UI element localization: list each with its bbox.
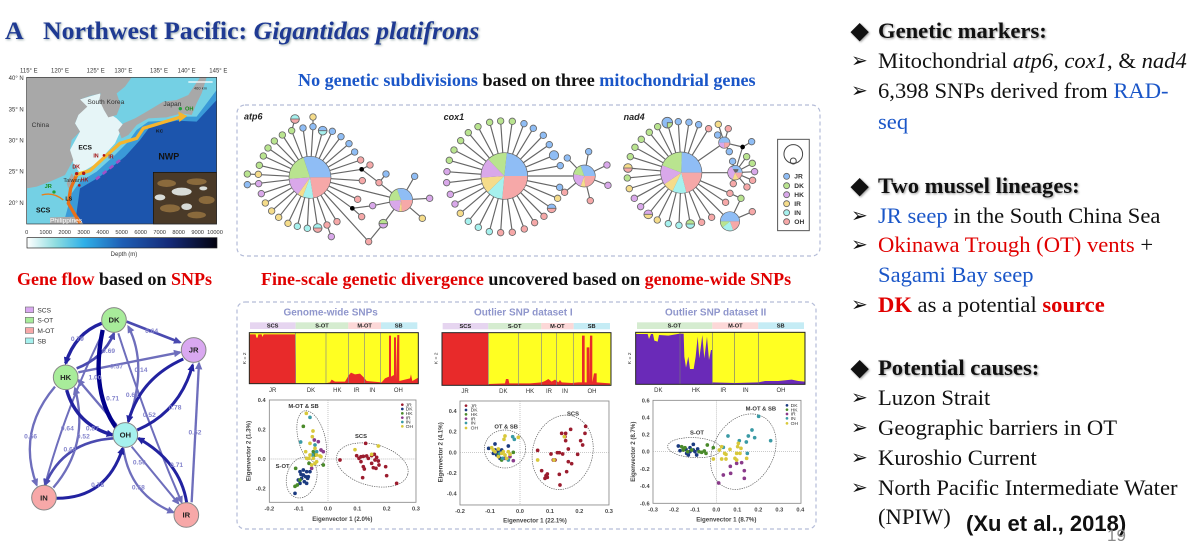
heading: two mussel lineages: Two mussel lineages:: [878, 173, 1080, 198]
chart: PCA scatter plot: 0.0: [712, 508, 720, 514]
map: Northwest Pacific bathymetry: 135° E: [150, 68, 168, 74]
chart: gene flow network: HK: [60, 373, 72, 382]
chart: gene flow network: 0.58: [132, 485, 145, 492]
chart: PCA scatter plot: 0.6: [642, 398, 650, 404]
chart: PCA scatter plot: S-OT: [276, 464, 290, 470]
chart: PCA scatter plot: 0.1: [546, 509, 554, 515]
chart: PCA scatter plot: 0.4: [796, 508, 805, 514]
chart: PCA scatter plot: OT & SB: [494, 424, 518, 430]
legend: haplotype populations: OH: [794, 219, 804, 226]
text block: genetic markers: seq: [878, 109, 908, 134]
chart: PCA scatter plot: SCS: [355, 434, 367, 440]
chart: PCA scatter plot: -0.3: [648, 508, 658, 514]
text block: potential causes: Geographic barriers in OT: [878, 415, 1117, 440]
chart: gene flow network: 0.68: [64, 446, 77, 453]
chart: gene flow network: 0.56: [24, 433, 37, 440]
chart: STRUCTURE bar plot: SCS: [460, 324, 471, 330]
text block: potential causes: Luzon Strait: [878, 385, 990, 410]
chart: STRUCTURE bar plot: OH: [776, 388, 785, 394]
text block: potential causes: North Pacific Intermediate Water: [878, 475, 1178, 500]
chart: STRUCTURE bar plot: OH: [394, 388, 403, 394]
chart: PCA scatter plot: 0.0: [642, 450, 650, 456]
chart: PCA scatter plot: SCS: [567, 411, 579, 417]
chart: STRUCTURE bar plot: IR: [720, 388, 727, 394]
chart: PCA scatter plot: 0.0: [258, 457, 266, 463]
text block: potential causes: (NPIW): [878, 504, 951, 529]
chart: gene flow network: 0.52: [188, 430, 202, 437]
legend: haplotype populations: DK: [794, 183, 804, 190]
chart: gene flow network: SB: [37, 338, 47, 345]
chart: gene flow network: [24, 307, 206, 527]
chart: PCA scatter plot: HK: [791, 407, 798, 413]
chart: PCA scatter plot: 0.1: [733, 508, 741, 514]
chart: gene flow network: 0.52: [143, 412, 156, 419]
heading: fine-scale divergence: Fine-scale genetic divergence uncovered based on genome-wide SNPs: [261, 269, 791, 289]
chart: PCA scatter plot: 0.2: [258, 427, 266, 433]
chart: PCA scatter plot: 0.2: [449, 430, 457, 436]
chart: STRUCTURE bar plot: DK: [654, 388, 662, 394]
map: Northwest Pacific bathymetry: 9000: [191, 230, 204, 236]
chart: PCA scatter plot: 0.3: [775, 508, 783, 514]
text block: genetic markers: Mitochondrial atp6, cox1, & nad4: [878, 48, 1187, 73]
text block: potential causes: ➢: [851, 417, 868, 439]
text block: potential causes: ➢: [851, 477, 868, 499]
chart: PCA scatter plot: Eigenvector 1 (22.1%): [503, 518, 567, 525]
panel: outlier SNP dataset II: [627, 308, 805, 523]
map: Northwest Pacific bathymetry: 40° N: [9, 76, 24, 82]
chart: PCA scatter plot: -0.2: [447, 471, 457, 477]
chart: STRUCTURE bar plot: M-OT: [550, 324, 565, 330]
chart: STRUCTURE bar plot: S-OT: [668, 323, 682, 329]
chart: PCA scatter plot: Eigenvector 1 (2.0%): [312, 516, 372, 523]
map: Northwest Pacific bathymetry: 30° N: [9, 138, 24, 144]
chart: PCA scatter plot: Eigenvector 2 (8.7%): [630, 422, 637, 482]
chart: gene flow network: SCS: [37, 307, 52, 314]
text block: mussel lineages: [850, 173, 1160, 317]
chart: PCA scatter plot: JR: [471, 403, 477, 409]
panel: outlier SNP dataset II: Outlier SNP dataset II: [665, 308, 767, 319]
chart: PCA scatter plot: -0.1: [485, 509, 495, 515]
chart: STRUCTURE bar plot: JR: [269, 388, 277, 394]
chart: gene flow network: S-OT: [37, 318, 53, 325]
chart: gene flow network: OH: [120, 431, 132, 440]
chart: gene flow network: 0.14: [135, 367, 148, 374]
chart: haplotype networks: nad4: [624, 112, 645, 122]
map: Northwest Pacific bathymetry: KC: [156, 129, 164, 135]
chart: gene flow network: 0.78: [91, 482, 104, 489]
chart: PCA scatter plot: OH: [471, 426, 479, 432]
chart: haplotype networks: cox1: [444, 112, 464, 122]
heading: two mussel lineages: ◆: [851, 173, 868, 198]
text block: genetic markers: ➢: [851, 50, 868, 72]
chart: PCA scatter plot: M-OT & SB: [746, 407, 776, 413]
chart: PCA scatter plot: 0.2: [575, 509, 583, 515]
map: Northwest Pacific bathymetry: 3000: [77, 230, 90, 236]
map: Northwest Pacific bathymetry: 35° N: [9, 107, 24, 113]
chart: PCA scatter plot: DK: [406, 407, 413, 413]
map: Northwest Pacific bathymetry: 5000: [115, 230, 128, 236]
chart: PCA scatter plot: Eigenvector 2 (1.3%): [245, 421, 252, 481]
text block: mussel lineages: ➢: [851, 205, 868, 227]
chart: gene flow network: M-OT: [37, 328, 54, 335]
chart: PCA scatter plot: 0.3: [605, 509, 613, 515]
chart: STRUCTURE bar plot: OH: [587, 389, 596, 395]
chart: STRUCTURE bar plot: SB: [395, 324, 403, 330]
map: Northwest Pacific bathymetry: Taiwan: [63, 178, 81, 184]
map: Northwest Pacific bathymetry: [9, 68, 227, 258]
heading: gene flow: Gene flow based on SNPs: [17, 269, 212, 289]
chart: PCA scatter plot: 0.4: [642, 415, 651, 421]
chart: PCA scatter plot: HK: [406, 411, 413, 417]
map: Northwest Pacific bathymetry: IN: [93, 153, 99, 159]
chart: gene flow network: IR: [182, 511, 191, 520]
map: Northwest Pacific bathymetry: 25° N: [9, 170, 24, 176]
chart: PCA scatter plot: 0.0: [324, 507, 332, 513]
chart: STRUCTURE bar plot: M-OT: [357, 324, 372, 330]
heading: potential causes: ◆: [851, 355, 868, 380]
chart: STRUCTURE bar plot: K = 2: [433, 352, 439, 364]
chart: STRUCTURE bar plot: SB: [777, 323, 785, 329]
map: Northwest Pacific bathymetry: Japan: [163, 101, 182, 108]
chart: PCA scatter plot: [245, 398, 420, 523]
chart: PCA scatter plot: 0.2: [383, 507, 391, 513]
map: Northwest Pacific bathymetry: 125° E: [87, 68, 105, 74]
chart: PCA scatter plot: -0.1: [294, 507, 304, 513]
legend: haplotype populations: [778, 139, 809, 231]
map: Northwest Pacific bathymetry: China: [32, 122, 49, 129]
chart: PCA scatter plot: IR: [406, 415, 411, 421]
chart: cox1 network: [447, 121, 608, 233]
map: Northwest Pacific bathymetry: 130° E: [114, 68, 132, 74]
map: Northwest Pacific bathymetry: 7000: [153, 230, 166, 236]
text block: mussel lineages: DK as a potential source: [878, 292, 1105, 317]
chart: PCA scatter plot: Eigenvector 2 (4.1%): [438, 422, 445, 482]
chart: PCA scatter plot: IN: [471, 421, 476, 427]
chart: STRUCTURE bar plot: JR: [461, 389, 469, 395]
panel: genome-wide SNPs: Genome-wide SNPs: [283, 308, 378, 319]
chart: gene flow network: 0.69: [102, 348, 115, 355]
text block: mussel lineages: ➢: [851, 234, 868, 256]
chart: STRUCTURE bar plot: M-OT: [728, 323, 743, 329]
chart: PCA scatter plot: IN: [406, 420, 411, 426]
panel: haplotype networks frame: [237, 105, 820, 256]
heading: genetic markers: Genetic markers:: [878, 18, 1047, 43]
legend: haplotype populations: HK: [794, 192, 804, 199]
chart: gene flow network: IN: [40, 493, 48, 502]
map: Northwest Pacific bathymetry: JR: [45, 184, 52, 190]
map: Northwest Pacific bathymetry: 120° E: [51, 68, 69, 74]
chart: STRUCTURE bar plot: SCS: [267, 324, 279, 330]
chart: gene flow network: 0.57: [110, 364, 123, 371]
map: Northwest Pacific bathymetry: Philippines: [50, 217, 83, 224]
chart: gene flow network: DK: [108, 316, 120, 325]
map: Northwest Pacific bathymetry: SCS: [36, 208, 51, 215]
map: Northwest Pacific bathymetry: OH: [185, 107, 193, 113]
chart: STRUCTURE bar plot: IN: [369, 388, 375, 394]
chart: STRUCTURE bar plot: S-OT: [315, 324, 329, 330]
chart: PCA scatter plot: OH: [791, 421, 799, 427]
chart: gene flow network: 0.87: [86, 425, 99, 432]
chart: PCA scatter plot: -0.1: [690, 508, 700, 514]
chart: PCA scatter plot: -0.2: [669, 508, 679, 514]
map: Northwest Pacific bathymetry: 140° E: [178, 68, 196, 74]
map: Northwest Pacific bathymetry: ECS: [78, 144, 93, 151]
chart: PCA scatter plot: -0.4: [447, 492, 458, 498]
chart: gene flow network: 0.71: [106, 395, 119, 402]
chart: gene flow network: 0.61: [126, 392, 139, 399]
map: Northwest Pacific bathymetry: 0: [25, 230, 28, 236]
chart: PCA scatter plot: 0.0: [516, 509, 524, 515]
chart: atp6 network: [247, 115, 430, 242]
map: Northwest Pacific bathymetry: 20° N: [9, 201, 24, 207]
heading: mitochondrial genes: No genetic subdivisions based on three mitochondrial genes: [298, 70, 756, 90]
chart: haplotype networks: [244, 112, 809, 242]
map: Northwest Pacific bathymetry: 1000: [39, 230, 52, 236]
map: Northwest Pacific bathymetry: HK: [81, 177, 89, 183]
text block: potential causes: Kuroshio Current: [878, 445, 1037, 470]
panel: outlier SNP dataset I: [433, 308, 613, 525]
chart: PCA scatter plot: HK: [471, 412, 478, 418]
chart: haplotype networks: atp6: [244, 112, 263, 122]
chart: STRUCTURE bar plot: S-OT: [508, 324, 522, 330]
chart: gene flow network: JR: [189, 346, 199, 355]
chart: PCA scatter plot: -0.2: [640, 467, 650, 473]
text block: genetic markers: ➢: [851, 80, 868, 102]
map: Northwest Pacific bathymetry: DK: [72, 165, 80, 171]
chart: PCA scatter plot: DK: [791, 403, 798, 409]
map: Northwest Pacific bathymetry: 6000: [134, 230, 147, 236]
text block: potential causes: ➢: [851, 447, 868, 469]
map: Northwest Pacific bathymetry: 10000: [207, 230, 223, 236]
map: Northwest Pacific bathymetry: Depth (m): [111, 252, 137, 258]
chart: PCA scatter plot: JR: [406, 402, 412, 408]
panel: SNP analyses frame: [237, 302, 816, 529]
map: Northwest Pacific bathymetry: South Korea: [87, 99, 125, 106]
chart: STRUCTURE bar plot: K = 2: [242, 352, 248, 364]
text block: mussel lineages: JR seep in the South China Sea: [878, 203, 1160, 228]
chart: gene flow network: 1.00: [89, 374, 102, 381]
page number: 19: [1107, 526, 1126, 545]
chart: gene flow network: 0.79: [71, 336, 84, 343]
citation: (Xu et al., 2018): [966, 511, 1126, 536]
text block: potential causes: ➢: [851, 387, 868, 409]
chart: STRUCTURE bar plot: HK: [526, 389, 534, 395]
chart: STRUCTURE bar plot: [242, 322, 418, 394]
chart: PCA scatter plot: [630, 398, 805, 523]
chart: nad4 network: [624, 117, 755, 231]
map: Northwest Pacific bathymetry: IR: [108, 154, 114, 160]
map: Northwest Pacific bathymetry: 4000: [96, 230, 109, 236]
chart: PCA scatter plot: [438, 401, 613, 525]
chart: gene flow network: 0.52: [77, 433, 90, 440]
chart: STRUCTURE bar plot: DK: [307, 388, 315, 394]
chart: PCA scatter plot: Eigenvector 1 (8.7%): [696, 516, 756, 523]
chart: PCA scatter plot: IR: [791, 412, 796, 418]
chart: STRUCTURE bar plot: IR: [546, 389, 553, 395]
chart: STRUCTURE bar plot: [433, 323, 611, 395]
chart: PCA scatter plot: DK: [471, 408, 478, 414]
text block: genetic markers: [850, 18, 1187, 134]
chart: PCA scatter plot: IR: [471, 416, 476, 422]
chart: STRUCTURE bar plot: SB: [588, 324, 596, 330]
map: Northwest Pacific bathymetry: 115° E: [20, 68, 38, 74]
chart: PCA scatter plot: -0.6: [640, 501, 650, 507]
panel: outlier SNP dataset I: Outlier SNP dataset I: [474, 308, 573, 319]
map: Northwest Pacific bathymetry: 460 km: [194, 85, 208, 90]
chart: PCA scatter plot: 0.4: [449, 409, 458, 415]
chart: PCA scatter plot: IN: [791, 416, 796, 422]
chart: STRUCTURE bar plot: IN: [562, 389, 568, 395]
chart: STRUCTURE bar plot: IN: [743, 388, 749, 394]
chart: PCA scatter plot: 0.1: [353, 507, 361, 513]
map: Northwest Pacific bathymetry: 8000: [172, 230, 185, 236]
chart: PCA scatter plot: -0.2: [455, 509, 465, 515]
chart: PCA scatter plot: -0.2: [256, 486, 266, 492]
map: Northwest Pacific bathymetry: 145° E: [209, 68, 227, 74]
legend: haplotype populations: IR: [794, 201, 801, 208]
text block: mussel lineages: ➢: [851, 294, 868, 316]
legend: haplotype populations: IN: [794, 210, 801, 217]
text block: mussel lineages: Okinawa Trough (OT) vents +: [878, 232, 1153, 257]
chart: PCA scatter plot: 0.4: [258, 398, 267, 404]
chart: PCA scatter plot: OH: [406, 424, 414, 430]
chart: STRUCTURE bar plot: DK: [499, 389, 507, 395]
chart: gene flow network: 0.71: [170, 462, 183, 469]
heading: genetic markers: ◆: [851, 18, 868, 43]
chart: PCA scatter plot: 0.2: [754, 508, 762, 514]
legend: haplotype populations: JR: [794, 174, 803, 181]
panel: genome-wide SNPs: [242, 308, 420, 523]
text block: genetic markers: 6,398 SNPs derived from RAD-: [878, 78, 1169, 103]
chart: PCA scatter plot: 0.3: [412, 507, 420, 513]
chart: gene flow network: 0.50: [133, 460, 146, 467]
chart: STRUCTURE bar plot: [627, 322, 805, 394]
map: Northwest Pacific bathymetry: LS: [65, 197, 73, 203]
heading: potential causes: Potential causes:: [878, 355, 1039, 380]
map: Northwest Pacific bathymetry: NWP: [158, 152, 179, 162]
map: Northwest Pacific bathymetry: 2000: [58, 230, 71, 236]
text block: potential causes: [850, 355, 1178, 529]
chart: PCA scatter plot: S-OT: [690, 430, 704, 436]
chart: STRUCTURE bar plot: IR: [354, 388, 360, 394]
chart: STRUCTURE bar plot: HK: [333, 388, 341, 394]
chart: gene flow network: 0.64: [145, 328, 158, 335]
chart: gene flow network: 0.64: [61, 425, 74, 432]
title: A Northwest Pacific: Gigantidas platifrons: [5, 16, 479, 45]
chart: PCA scatter plot: M-OT & SB: [288, 404, 319, 410]
text block: mussel lineages: Sagami Bay seep: [878, 262, 1034, 287]
chart: PCA scatter plot: -0.2: [264, 507, 274, 513]
chart: PCA scatter plot: 0.0: [449, 450, 457, 456]
chart: PCA scatter plot: -0.4: [640, 484, 651, 490]
chart: gene flow network: 0.78: [168, 405, 182, 412]
chart: STRUCTURE bar plot: HK: [692, 388, 700, 394]
chart: PCA scatter plot: 0.2: [642, 433, 650, 439]
chart: STRUCTURE bar plot: K = 2: [627, 352, 633, 364]
legend: gene flow groups: [25, 307, 34, 344]
